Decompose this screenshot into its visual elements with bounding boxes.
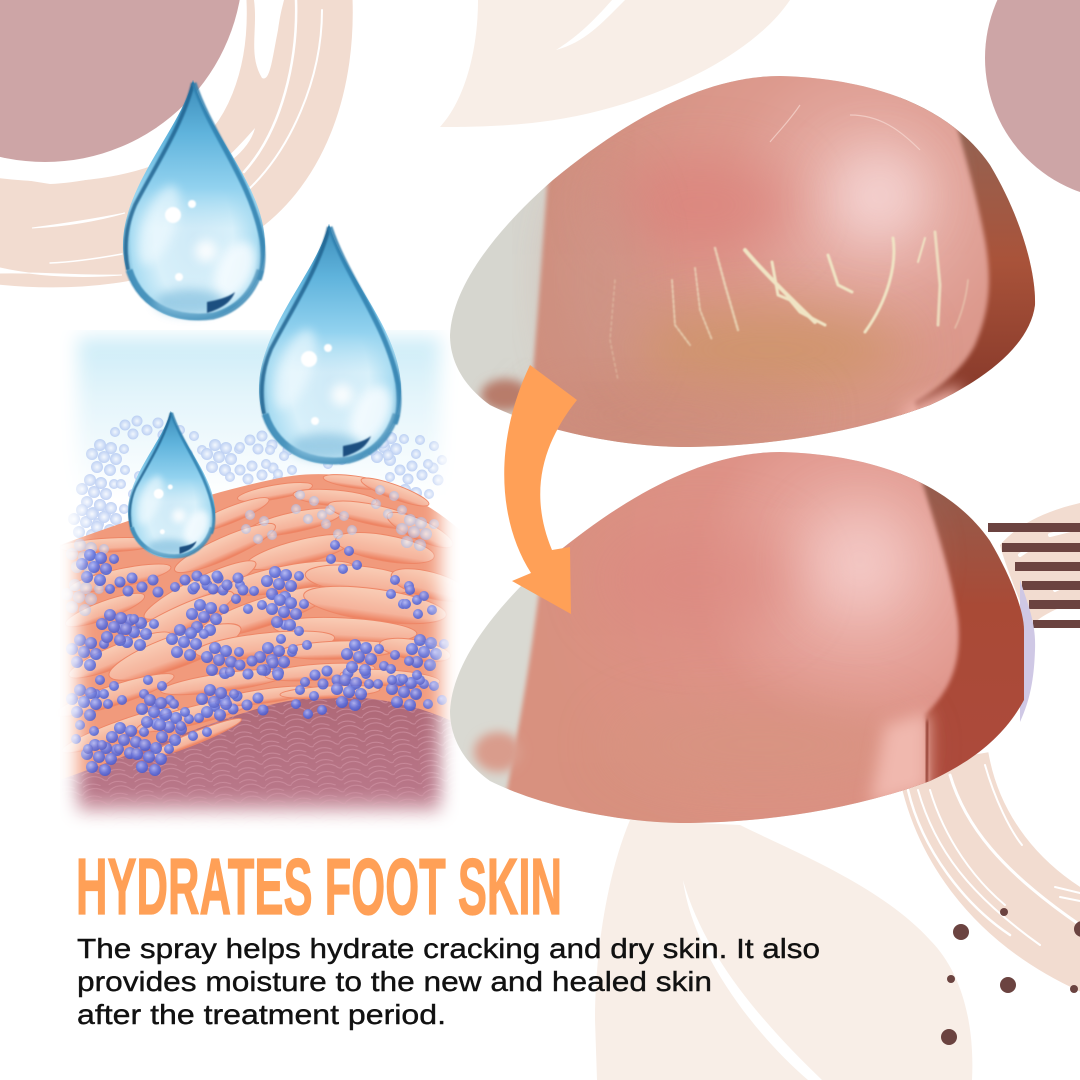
pale bubbles over the skin surface xyxy=(61,485,439,616)
decorative circle: top left xyxy=(0,0,243,162)
water drop: small xyxy=(128,411,215,558)
dots xyxy=(941,908,1080,1045)
deep pink skin layer xyxy=(60,686,460,830)
brush stroke with stripes: right xyxy=(1000,503,1080,628)
decorative circle: top right xyxy=(985,0,1080,200)
body text: after the treatment period. xyxy=(77,999,446,1030)
lavender sliver behind lower photo xyxy=(1020,580,1035,722)
skin cross-section illustration xyxy=(53,330,472,830)
photo: healed heel (after) xyxy=(450,452,1024,823)
water drop: large right xyxy=(259,224,401,464)
pale rising bubbles xyxy=(68,415,447,541)
brush stroke: top left xyxy=(0,0,322,277)
water drop: large top xyxy=(123,80,265,320)
scales xyxy=(53,472,472,780)
body text xyxy=(77,933,820,1030)
cell texture xyxy=(60,686,460,830)
decorative leaf: bottom centre xyxy=(595,820,972,1080)
heading: HYDRATES FOOT SKIN xyxy=(76,842,562,931)
body text: The spray helps hydrate cracking and dry skin. It also xyxy=(77,933,820,964)
arrow: before to after xyxy=(504,365,577,614)
body text: provides moisture to the new and healed skin xyxy=(77,966,712,997)
decorative leaf: top centre xyxy=(440,0,790,127)
cracks xyxy=(610,232,968,380)
sky gradient xyxy=(70,330,448,470)
stripes xyxy=(988,523,1080,628)
brush stroke: bottom right xyxy=(908,760,1080,950)
photo: cracked heel (before) xyxy=(450,76,1036,447)
water bubbles xyxy=(66,540,449,776)
